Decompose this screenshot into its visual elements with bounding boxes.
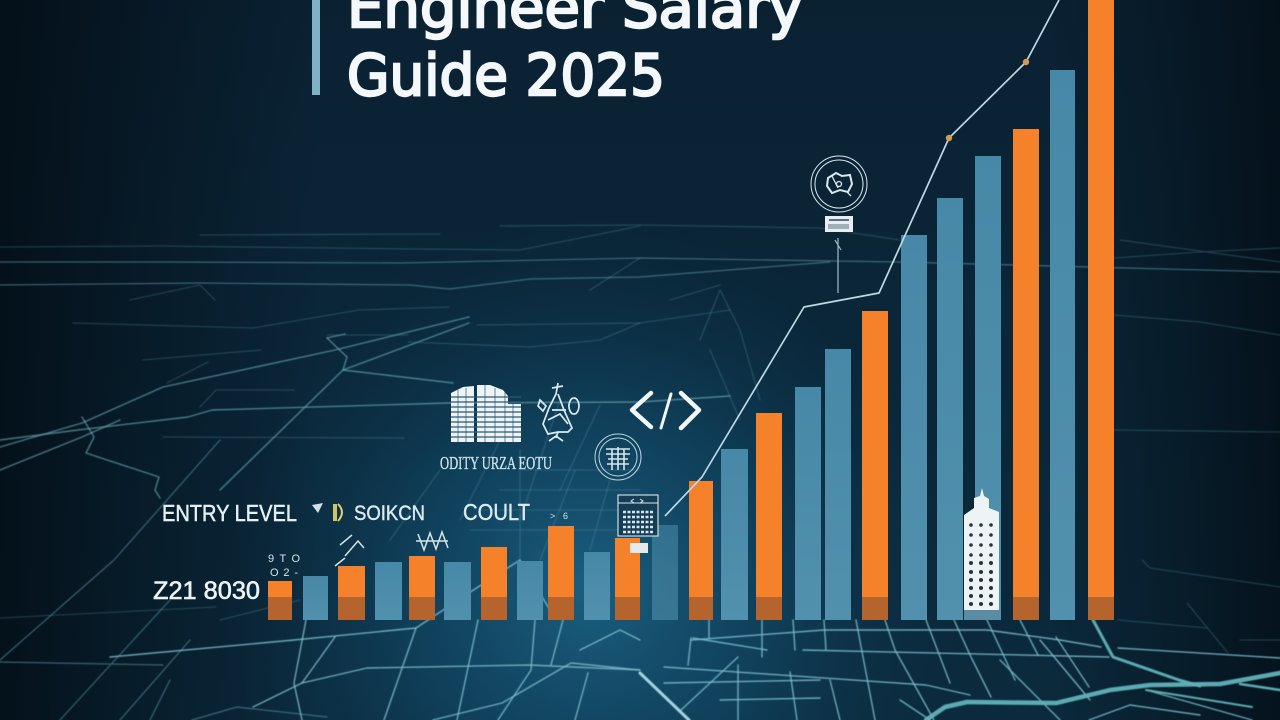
label: salary value: Z21 8030 xyxy=(153,577,260,605)
icon: gear seal xyxy=(811,156,867,212)
title xyxy=(347,0,803,109)
small bar annotations xyxy=(268,511,568,579)
icon: label plate and pin xyxy=(825,216,853,293)
icon: emblem seal xyxy=(595,434,641,480)
city map network lines xyxy=(0,225,1280,720)
small bar annotations: >6 xyxy=(550,511,568,521)
label: count: COULT xyxy=(463,499,530,525)
trend line xyxy=(665,0,1059,516)
icon: tower building xyxy=(964,488,999,620)
caption above chart: ODITY URZA EOTU xyxy=(440,453,552,473)
label: soikcn: SOIKCN xyxy=(354,502,425,525)
icon: code brackets xyxy=(632,393,699,428)
title accent bar xyxy=(312,0,320,95)
icon: small marker xyxy=(312,503,342,521)
icon: network figure xyxy=(538,383,579,441)
label: entry level: ENTRY LEVEL xyxy=(162,500,297,526)
river xyxy=(926,620,1280,720)
small bar annotations: O2- xyxy=(270,567,298,579)
title: Guide 2025 xyxy=(347,43,665,109)
bar chart xyxy=(268,0,1114,620)
icon: office building xyxy=(451,385,521,442)
bar reflections xyxy=(268,597,1114,620)
icon: calculator xyxy=(618,495,658,553)
small bar annotations: 9TO xyxy=(268,553,300,565)
